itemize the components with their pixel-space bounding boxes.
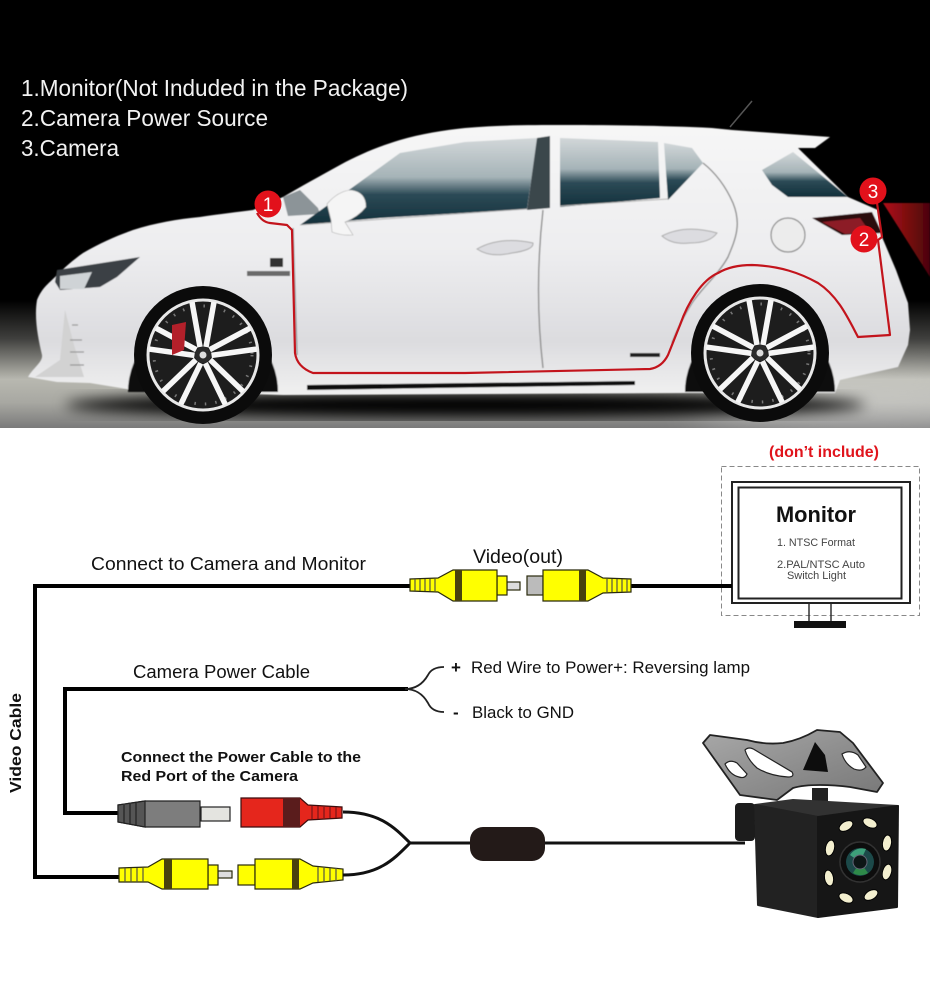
panel: car photo	[0, 0, 930, 431]
legend text: 1.Monitor(Not Induded in the Package)	[21, 75, 408, 101]
power cable wire	[65, 689, 408, 813]
video cable wire	[35, 586, 412, 877]
fuel door	[771, 218, 805, 252]
monitor: 2.PAL/NTSC Auto	[777, 559, 865, 571]
sill stripe	[307, 381, 635, 390]
B pillar	[527, 136, 550, 210]
wheel arches	[127, 360, 278, 393]
monitor: 1. NTSC Format	[777, 537, 855, 549]
red camera beam	[883, 203, 930, 277]
inline module	[470, 827, 545, 861]
marker 3: 3	[868, 182, 878, 203]
marker 3	[860, 178, 886, 204]
red cable route	[257, 203, 890, 373]
side mirror	[327, 190, 366, 235]
door handles	[477, 241, 533, 255]
label: video cable: Video Cable	[8, 693, 25, 793]
mounting bracket	[703, 730, 883, 800]
label: black to GND: Black to GND	[472, 704, 574, 722]
label: connect the power cable	[121, 749, 361, 785]
marker 1	[254, 190, 282, 218]
yellow plug: top right	[527, 570, 631, 601]
camera Y cable	[343, 812, 745, 875]
front grille intake	[35, 310, 84, 377]
label: connect to camera and monitor: Connect to Camera and Monitor	[91, 554, 366, 574]
label: connect the power cable: Red Port of the Camera	[121, 768, 299, 785]
label: camera power cable: Camera Power Cable	[133, 662, 310, 682]
legend text	[22, 79, 407, 156]
yellow plug: bottom left	[119, 859, 232, 889]
monitor: Switch Light	[787, 570, 846, 582]
rear side badge	[630, 353, 660, 357]
antenna	[730, 101, 752, 127]
LEDs	[823, 816, 893, 905]
gray power plug	[118, 801, 230, 827]
bracket arm	[735, 803, 755, 841]
label: don't include: (don’t include)	[769, 444, 879, 461]
cube	[755, 800, 898, 817]
lens	[840, 842, 880, 882]
monitor	[721, 466, 920, 628]
yellow plug: top left	[410, 570, 520, 601]
label: red wire: +	[451, 658, 461, 677]
label: video out: Video(out)	[473, 547, 563, 568]
rear wheel	[691, 284, 829, 422]
marker 2	[850, 226, 878, 252]
camera	[703, 730, 898, 917]
power cable fork	[405, 667, 444, 712]
monitor: Monitor	[776, 502, 856, 527]
brake caliper	[172, 322, 186, 355]
legend text: 3.Camera	[21, 135, 119, 161]
marker 2: 2	[859, 230, 869, 251]
legend text: 2.Camera Power Source	[21, 105, 268, 131]
tail light	[812, 212, 882, 235]
red power plug	[241, 798, 342, 827]
headlight	[55, 257, 140, 290]
yellow plug: bottom right	[238, 859, 343, 889]
monitor wire	[630, 584, 732, 588]
rear door window	[560, 138, 660, 207]
label: black to GND: -	[453, 703, 459, 722]
car body	[28, 125, 910, 395]
hatch window	[762, 152, 848, 197]
windscreen base	[283, 190, 320, 216]
label: connect the power cable: Connect the Power Cable to the	[121, 749, 361, 766]
label: red wire: Red Wire to Power+: Reversing lamp	[471, 659, 750, 677]
fender badge	[247, 258, 290, 276]
door front window	[300, 138, 537, 225]
front wheel	[134, 286, 272, 424]
marker 1: 1	[263, 195, 273, 216]
door seams	[293, 163, 737, 368]
panel: wiring diagram	[8, 444, 920, 917]
bracket slots	[725, 748, 866, 778]
